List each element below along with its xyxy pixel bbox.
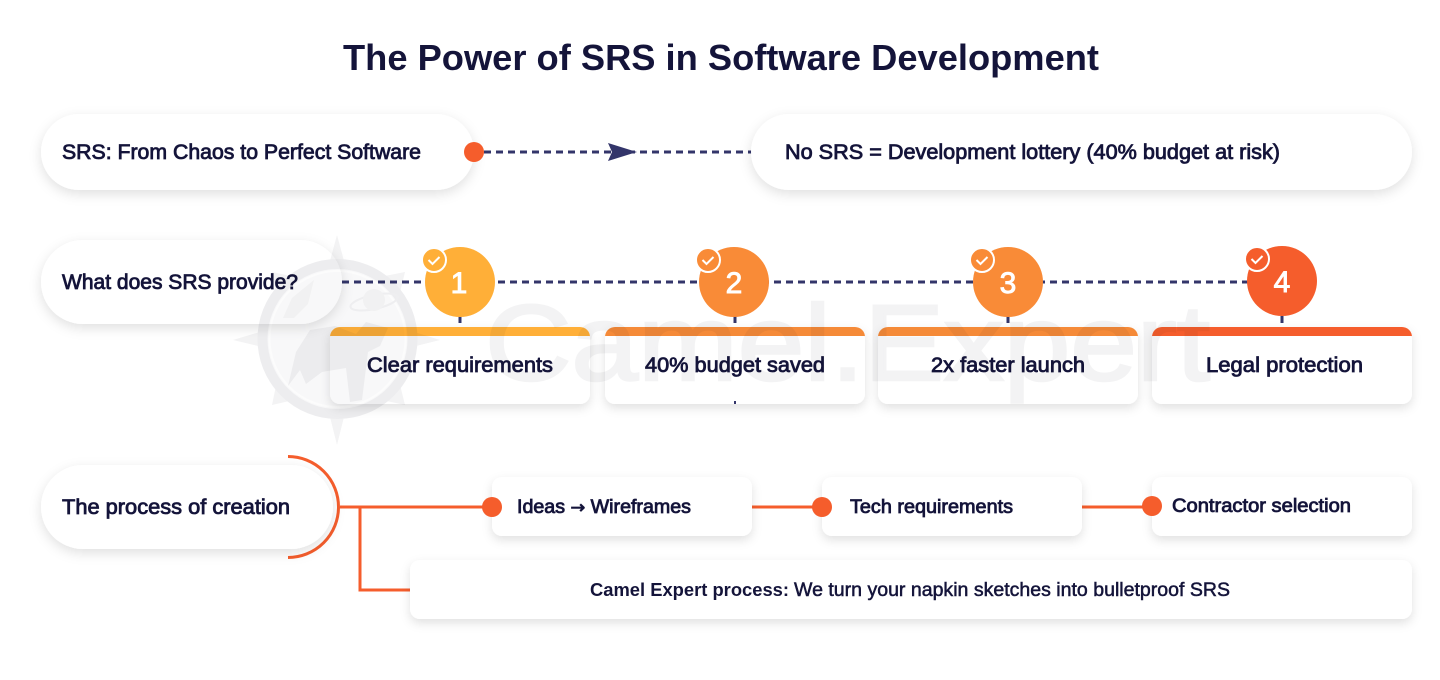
callout: Camel Expert process xyxy=(410,560,1412,619)
row 1: chaos to software xyxy=(41,114,1412,190)
row 2: what SRS provides xyxy=(41,240,1412,404)
step: contractor selection: Contractor selection xyxy=(1172,496,1351,517)
connectors xyxy=(340,507,1152,590)
pill: process of creation: The process of creation xyxy=(62,496,290,519)
step 2: 40% budget saved xyxy=(645,354,825,377)
row 3: process of creation xyxy=(41,456,1412,619)
step 1 xyxy=(330,247,590,404)
callout: Camel Expert process: We turn your napkin sketches into bulletproof SRS xyxy=(794,580,1230,601)
title: The Power of SRS in Software Development xyxy=(343,37,1099,78)
step 3: 2x faster launch xyxy=(931,354,1085,377)
pill: SRS from chaos xyxy=(41,114,474,190)
dot: arrow start xyxy=(464,142,484,162)
pill: SRS from chaos: SRS: From Chaos to Perfect Software xyxy=(62,141,421,164)
pill: process of creation xyxy=(41,456,338,558)
watermark: compass emblem xyxy=(233,235,440,445)
dashed timeline xyxy=(342,280,1282,284)
step 4 xyxy=(1152,246,1412,404)
step 3: 3 xyxy=(1000,267,1016,300)
step: tech requirements xyxy=(812,477,1082,536)
step: ideas to wireframes xyxy=(482,477,752,536)
step 3 xyxy=(878,247,1138,404)
step 2 xyxy=(605,247,865,404)
pill: what does SRS provide xyxy=(41,240,342,324)
connector: dashed arrow xyxy=(484,143,752,161)
step: contractor selection xyxy=(1142,477,1412,536)
step: tech requirements: Tech requirements xyxy=(850,497,1013,518)
callout: Camel Expert process: Camel Expert process: xyxy=(590,580,789,600)
pill: no SRS: No SRS = Development lottery (40% budget at risk) xyxy=(785,141,1280,164)
step 4: 4 xyxy=(1274,266,1290,299)
step 2: 2 xyxy=(726,267,742,300)
watermark: wordmark: Camel.Expert xyxy=(485,282,1210,403)
step 1: 1 xyxy=(451,267,467,300)
pill: no SRS xyxy=(751,114,1412,190)
step 1: Clear requirements xyxy=(367,354,553,377)
step: ideas to wireframes: Ideas → Wireframes xyxy=(517,497,691,518)
pill: what does SRS provide: What does SRS provide? xyxy=(62,271,298,294)
step 4: Legal protection xyxy=(1206,354,1363,377)
